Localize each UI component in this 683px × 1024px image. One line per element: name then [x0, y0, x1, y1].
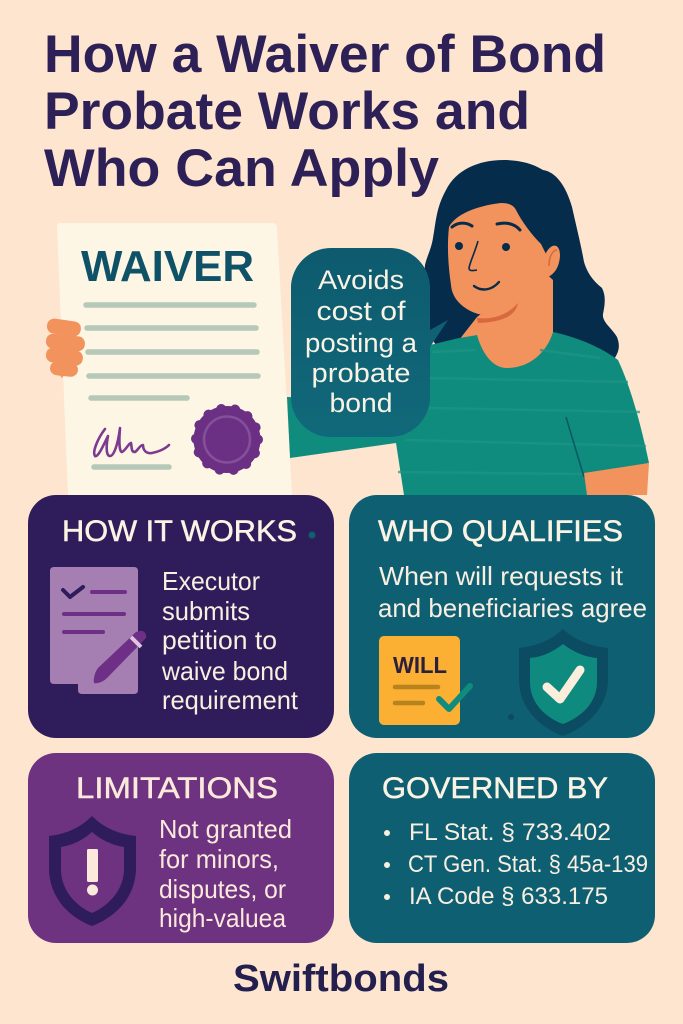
speech bubble [291, 248, 448, 437]
panel: how it works [28, 495, 334, 738]
text: how it works: Executor [162, 566, 260, 596]
text: how it works: submits [162, 596, 250, 626]
title: How a Waiver of Bond [44, 25, 606, 84]
text: how it works: petition to [162, 625, 277, 655]
document heading: WAIVER [81, 242, 254, 291]
speech bubble: cost of [316, 296, 406, 326]
document lines [86, 305, 258, 467]
speech bubble: bond [330, 388, 392, 418]
text: limitations: high-valuea [159, 903, 287, 933]
text: limitations: Not granted [159, 814, 292, 844]
speech bubble: posting a [305, 328, 418, 358]
text: who qualifies: and beneficiaries agree [378, 593, 647, 623]
document: waiver [57, 223, 292, 495]
icon: checklist and pen [50, 567, 146, 694]
heading: limitations: LIMITATIONS [76, 772, 278, 805]
list: statutes: CT Gen. Stat. § 45a-139 [408, 851, 648, 878]
speech bubble: probate [312, 358, 410, 388]
speech bubble: Avoids [318, 265, 404, 295]
seal [194, 406, 260, 473]
text: limitations: disputes, or [159, 874, 286, 904]
title: Probate Works and [44, 82, 530, 141]
heading: how it works: HOW IT WORKS [62, 515, 297, 548]
text: how it works [161, 566, 299, 715]
text: who qualifies: When will requests it [379, 561, 624, 591]
text: who qualifies [378, 561, 647, 623]
text: limitations [159, 814, 292, 933]
brand: swiftbonds: Swiftbonds [233, 958, 449, 1000]
heading: governed by: GOVERNED BY [382, 772, 608, 805]
icon: will document [379, 636, 470, 725]
text: how it works: waive bond [161, 656, 288, 686]
icon: hand [45, 318, 86, 378]
list: statutes: IA Code § 633.175 [409, 883, 608, 910]
title [44, 25, 606, 198]
illustration: woman [287, 160, 649, 495]
panel: governed by [349, 753, 655, 943]
icon: will document: WILL [393, 652, 447, 678]
list: statutes [384, 819, 648, 910]
icon: shield check [519, 629, 608, 736]
text: limitations: for minors, [159, 844, 279, 874]
panel: limitations [28, 753, 334, 943]
panel: who qualifies [349, 495, 655, 738]
list: statutes: FL Stat. § 733.402 [409, 819, 611, 846]
heading: who qualifies: WHO QUALIFIES [378, 515, 623, 548]
text: how it works: requirement [162, 685, 299, 715]
title: Who Can Apply [44, 139, 440, 198]
signature [94, 428, 169, 456]
icon: shield warning [49, 816, 136, 926]
